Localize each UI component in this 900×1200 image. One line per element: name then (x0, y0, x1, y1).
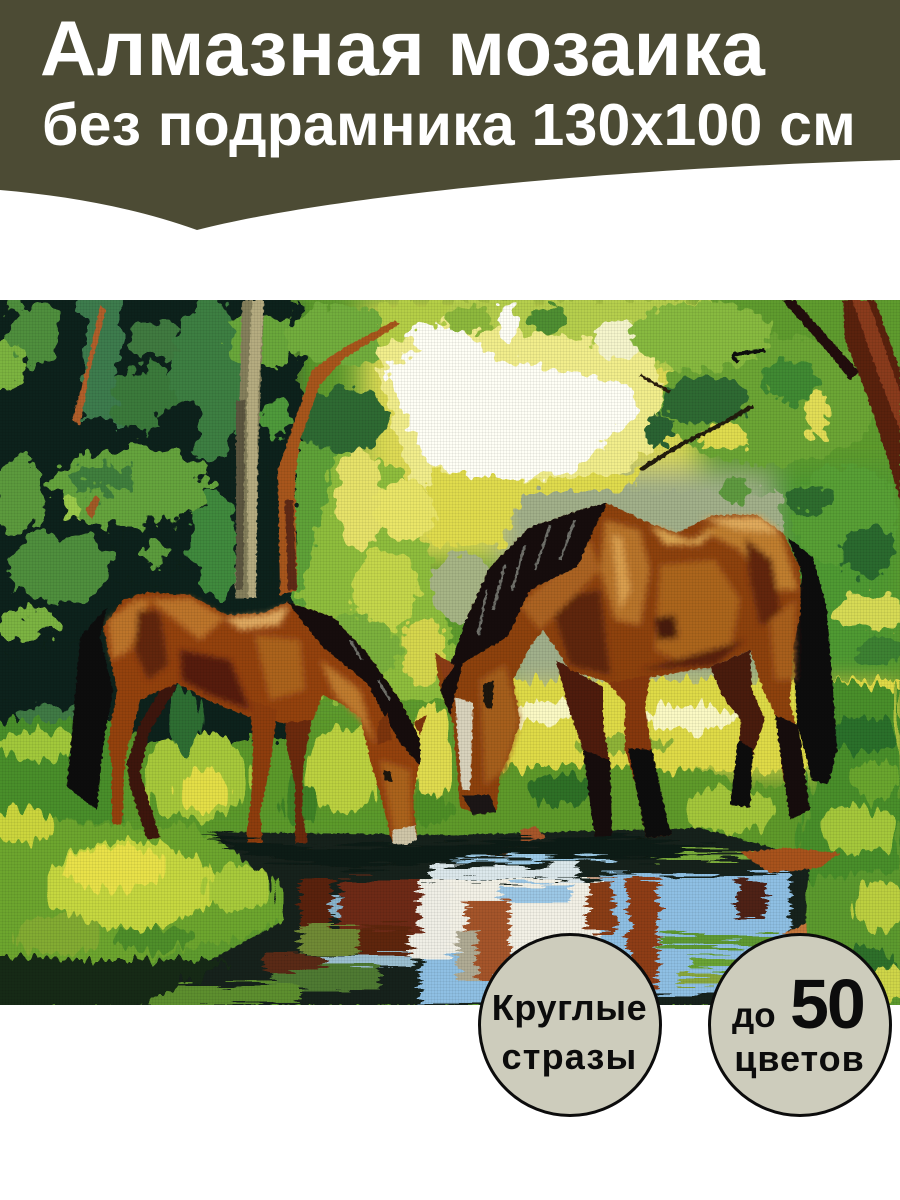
eye (483, 680, 494, 710)
far front leg (285, 720, 312, 844)
badge text (732, 965, 865, 1079)
badge: up to 50 colours (708, 933, 892, 1117)
coat highlights (480, 516, 798, 785)
painting: horses at forest pond (0, 300, 900, 1005)
body and neck (435, 503, 807, 817)
mane (287, 602, 420, 765)
badge text: Круглые (492, 987, 647, 1028)
ear (435, 653, 455, 680)
badge text: до (732, 996, 776, 1035)
eye (383, 770, 392, 782)
bright foliage and sky (285, 300, 900, 700)
mane (440, 503, 607, 715)
badge: round rhinestones (478, 933, 662, 1117)
ears (377, 713, 427, 745)
title: Алмазная мозаика (40, 4, 765, 92)
far hind leg (710, 650, 765, 807)
badge text: 50 (790, 965, 864, 1043)
tail (67, 607, 113, 810)
tail (787, 537, 837, 785)
meadow and grass (0, 680, 900, 880)
far front leg (556, 660, 612, 840)
small horse (67, 592, 427, 847)
left grass mound (0, 807, 900, 1010)
canvas stitch grid (0, 300, 900, 1005)
badge text: цветов (734, 1038, 865, 1079)
header banner (0, 0, 900, 230)
hind hock (775, 715, 810, 820)
badge text (492, 987, 647, 1077)
tree trunks and branches (72, 300, 900, 598)
dark hind leg (127, 680, 177, 840)
subtitle: без подрамника 130х100 см (42, 92, 856, 158)
muzzle (392, 825, 417, 845)
coat highlights (108, 598, 412, 838)
blaze (455, 697, 473, 790)
soft background: sky, mist, meadow (0, 300, 900, 1005)
muzzle (462, 795, 496, 815)
badge text: стразы (502, 1036, 637, 1077)
forest shadows and leaf clusters, left (0, 290, 300, 740)
near front leg (246, 716, 276, 843)
body and neck (103, 592, 420, 843)
waterline shadow (205, 835, 720, 870)
large horse (435, 503, 837, 840)
pond (100, 826, 872, 1005)
near front leg (608, 675, 672, 838)
